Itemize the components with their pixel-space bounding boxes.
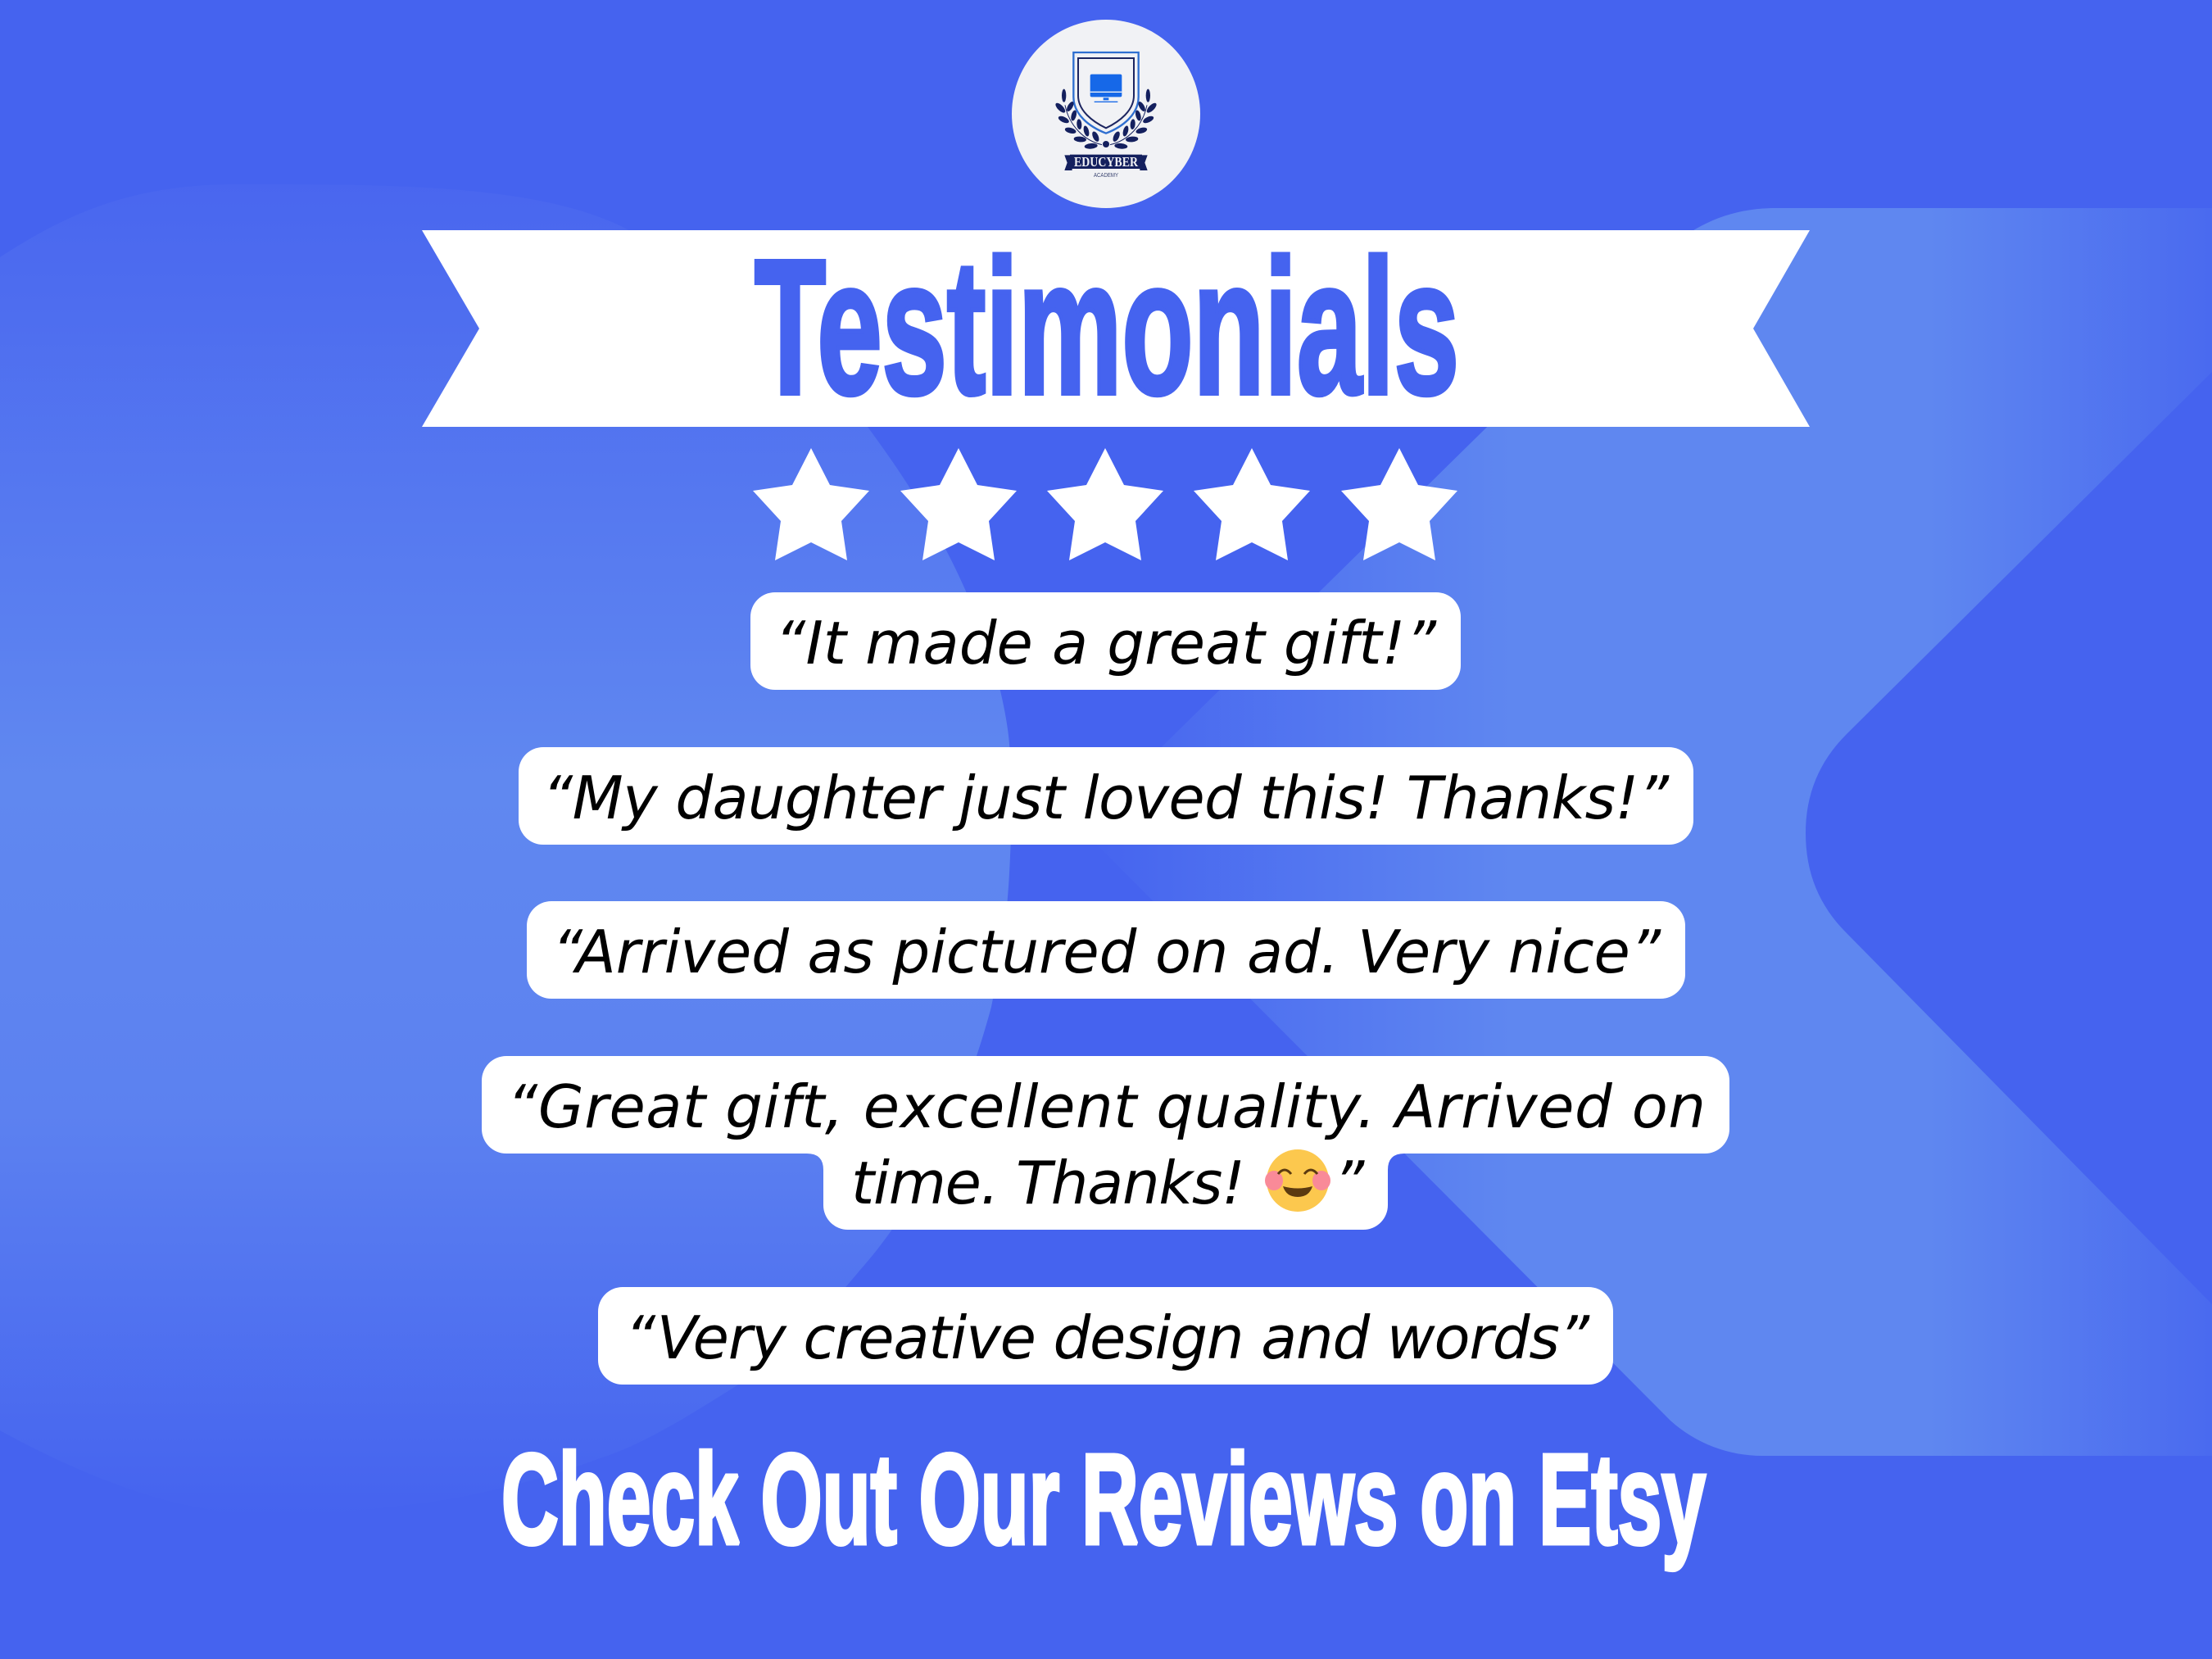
testimonial 2 [519, 747, 1693, 845]
testimonial 3 [527, 901, 1685, 999]
testimonial 4 [482, 1056, 1729, 1230]
ribbon banner [422, 230, 1810, 427]
testimonial 2: “My daughter just loved this! Thanks!” [542, 764, 1670, 832]
logo crest [1054, 52, 1158, 170]
testimonial 1: “It made a great gift!” [775, 609, 1437, 678]
testimonial 5: “Very creative design and words” [625, 1303, 1590, 1372]
testimonial 5 [598, 1287, 1613, 1385]
testimonial 4: “Great gift, excellent quality. Arrived on [507, 1072, 1706, 1141]
icon: smiling emoji [1265, 1149, 1330, 1212]
logo wordmark: EDUCYBER [1074, 154, 1139, 170]
testimonial 4: ” [1334, 1149, 1365, 1217]
testimonial 3: “Arrived as pictured on ad. Very nice” [552, 918, 1661, 986]
background shape: left blob [0, 184, 1012, 1515]
logo circle [1012, 20, 1200, 208]
logo subtitle: ACADEMY [1094, 173, 1118, 179]
five star rating [753, 448, 1457, 560]
logo badge [1012, 20, 1200, 208]
testimonial 1 [750, 592, 1461, 690]
testimonial 4: time. Thanks! [851, 1149, 1245, 1217]
title: Testimonials [755, 220, 1459, 434]
background shape: right chevron [1080, 208, 2212, 1456]
